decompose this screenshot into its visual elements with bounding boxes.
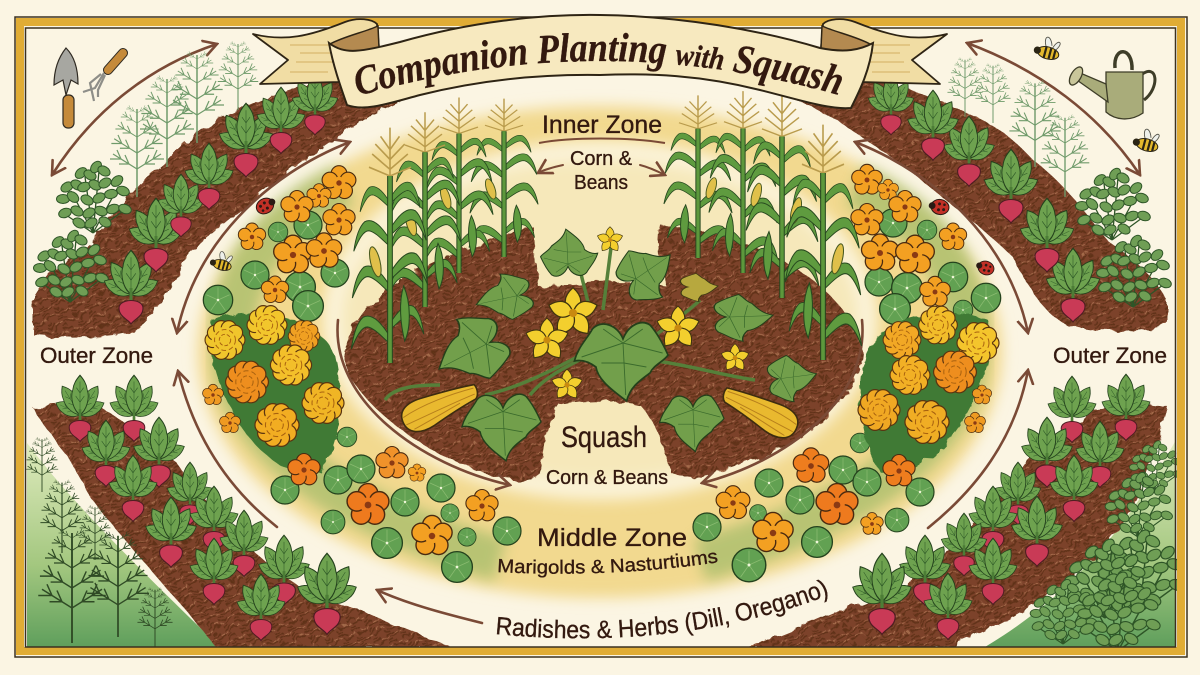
nasturtium flowers right xyxy=(716,164,967,551)
radishes bottom-right xyxy=(849,374,1153,640)
label: outer ring caption: Radishes & Herbs (Dill, Oregano) xyxy=(496,580,828,639)
marigold foliage right xyxy=(860,313,990,474)
icon: ladybug right low xyxy=(974,258,996,277)
label: inner zone: Inner Zone xyxy=(542,111,662,139)
arrow: inner right xyxy=(702,320,863,483)
squash flowers xyxy=(524,227,750,401)
arrow: outer top-right xyxy=(967,43,1140,175)
icon: ladybug left xyxy=(253,194,279,217)
nasturtium leaves right xyxy=(693,209,1001,582)
corn rows left xyxy=(351,98,538,363)
icon: bee left xyxy=(209,249,234,272)
squash fruit left xyxy=(397,377,484,437)
label: squash xyxy=(546,421,668,489)
banner ribbon xyxy=(329,15,873,108)
soil: bottom-right bed xyxy=(745,403,1168,648)
label: outer zone left: Outer Zone xyxy=(40,343,153,368)
label: middle zone: Middle Zone xyxy=(537,524,687,552)
dill rows top xyxy=(110,41,1089,197)
arrow: middle top-left xyxy=(177,142,350,333)
icon: trowel xyxy=(54,48,78,128)
squash plant xyxy=(385,227,819,461)
flow arrows xyxy=(52,43,1140,623)
dark dill bottom-left xyxy=(26,437,173,647)
radishes bottom-left xyxy=(53,375,360,641)
squash leaves xyxy=(423,229,819,461)
vines xyxy=(385,240,755,400)
title banner xyxy=(252,14,948,110)
squash fruit right xyxy=(716,381,803,443)
soil: top-left bed xyxy=(33,76,440,338)
nasturtium flowers left xyxy=(238,166,498,555)
arrow: corn label right xyxy=(640,165,665,175)
label: outer zone right: Outer Zone xyxy=(1053,343,1167,368)
arrow: right lower xyxy=(928,370,1028,528)
arrow: left lower xyxy=(178,371,277,527)
middle zone plants right xyxy=(693,164,1001,582)
icon: bee top right xyxy=(1032,34,1063,62)
arrow: bottom xyxy=(377,590,482,623)
soil: bottom-left bed xyxy=(32,405,455,648)
icon: garden fork xyxy=(83,53,123,101)
herb meadow bottom-right xyxy=(985,440,1176,647)
soil: centre mound xyxy=(345,225,862,480)
middle zone plants left xyxy=(203,166,521,582)
middle zone yellow wash xyxy=(198,106,1002,598)
label: squash: Corn & Beans xyxy=(546,467,668,489)
marigold foliage left xyxy=(210,313,340,474)
arrow: outer top-left xyxy=(52,44,217,175)
radishes top-left xyxy=(101,72,340,324)
radishes top-right xyxy=(866,72,1103,322)
arrow: inner left xyxy=(338,320,510,485)
title text: Companion Planting with Squash xyxy=(355,32,842,95)
arrow: corn label left xyxy=(538,165,563,173)
oregano plants xyxy=(34,159,1186,651)
label: inner zone: Beans xyxy=(574,172,628,194)
icon: bee right xyxy=(1131,126,1162,154)
label: middle zone: Marigolds & Nasturtiums xyxy=(498,552,718,578)
marigolds left xyxy=(203,306,344,446)
herb meadow bottom-left xyxy=(27,443,220,647)
label: inner zone: Corn & xyxy=(570,148,633,170)
marigolds right xyxy=(858,306,999,443)
nasturtium leaves left xyxy=(203,211,521,582)
label: middle zone xyxy=(498,524,718,578)
icon: ladybug right top xyxy=(927,198,950,216)
arrow: middle top-right xyxy=(855,142,1028,333)
label: inner zone xyxy=(539,111,665,194)
soil: top-right bed xyxy=(760,76,1167,331)
label: squash: Squash xyxy=(561,421,647,454)
corn rows right xyxy=(664,91,862,360)
banner tails xyxy=(253,19,947,84)
icon: watering can xyxy=(1067,52,1155,119)
